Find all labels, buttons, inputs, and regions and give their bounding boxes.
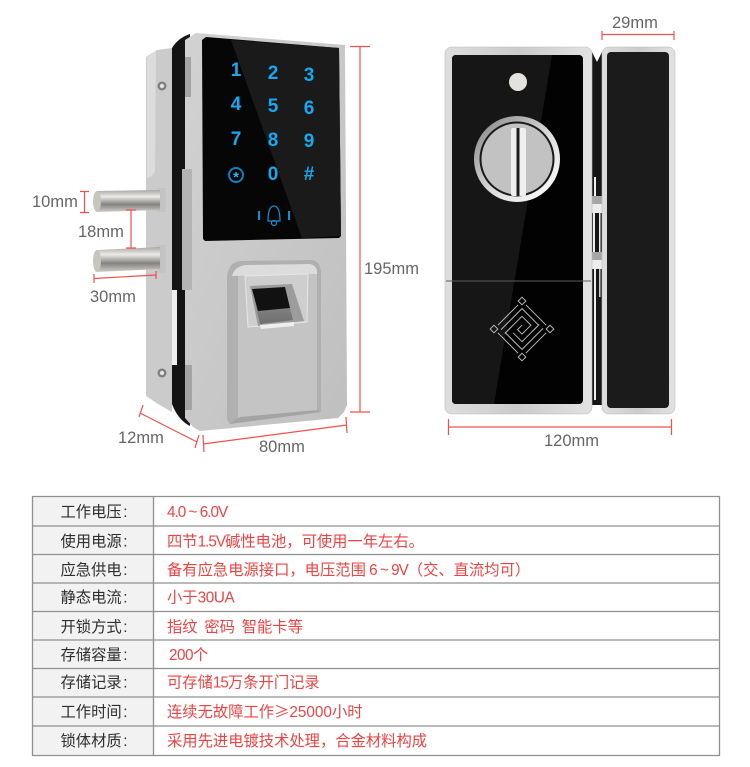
hinge covers: [182, 57, 192, 410]
row: working voltage: 4.0 ~ 6.0V: [167, 504, 229, 521]
right plate: [602, 47, 675, 414]
row: storage records: [60, 674, 320, 692]
dimension: 18mm: 18mm: [78, 223, 124, 241]
fingerprint housing: [227, 260, 321, 424]
dimension: 30mm: [90, 271, 156, 306]
label column shading: [33, 497, 153, 755]
keypad digits: 3: [304, 65, 314, 86]
product: side-angle lock with keypad: [93, 33, 347, 431]
keypad digits: 6: [304, 98, 314, 119]
row: storage capacity: 200个: [169, 647, 208, 664]
locking pins: [93, 188, 166, 273]
table grid: [32, 496, 720, 756]
dimension: 10mm: 10mm: [32, 193, 78, 211]
keypad digits: 9: [304, 131, 314, 152]
row: body material: 锁体材质:: [60, 733, 127, 750]
dimension: 120mm: 120mm: [544, 432, 599, 450]
row: storage records: 可存储15万条开门记录: [167, 674, 320, 692]
keypad digits: 5: [268, 96, 279, 117]
row: static current: [60, 590, 235, 606]
keypad glass panel: [202, 37, 341, 241]
row: unlock methods: 指纹 密码 智能卡等: [167, 618, 303, 636]
row: emergency power: 备有应急电源接口，电压范围 6 ~ 9V（交、直流均可）: [167, 561, 530, 579]
keypad digits: 2: [268, 63, 278, 84]
row: power source: 使用电源:: [60, 534, 127, 550]
black face: [452, 55, 583, 404]
row: power source: 四节1.5V碱性电池，可使用一年左右。: [167, 534, 424, 550]
product: rear lock unit: [445, 47, 675, 414]
dimension: 80mm: [203, 417, 347, 456]
dimension: 12mm: [118, 405, 199, 448]
row: working time: 工作时间:: [60, 704, 127, 721]
dimension: 195mm: 195mm: [364, 260, 419, 278]
left plate: [445, 47, 592, 414]
dimension: 18mm: [78, 210, 136, 248]
dimension: 30mm: 30mm: [90, 288, 136, 306]
diamond logo: [490, 297, 554, 361]
row: working voltage: 工作电压:: [60, 504, 127, 521]
indicator dot: [509, 73, 527, 91]
connector between plates: [592, 52, 602, 405]
row: unlock methods: [60, 618, 303, 636]
leather pad: [607, 52, 669, 408]
glass gap strip: [172, 34, 190, 426]
thumb-turn knob: [474, 116, 560, 202]
row: working voltage: [60, 504, 229, 521]
dimension: 29mm: [602, 14, 674, 40]
dimension: 10mm: [32, 191, 89, 212]
dimension: 12mm: 12mm: [118, 429, 164, 447]
row: working time: [60, 700, 363, 722]
row: unlock methods: 开锁方式:: [60, 619, 127, 636]
dimension: 80mm: 80mm: [259, 438, 305, 456]
dimension: 29mm: 29mm: [612, 14, 658, 32]
row: emergency power: 应急供电:: [60, 561, 127, 579]
keypad digits: 0: [268, 164, 278, 185]
keypad digits: #: [304, 164, 315, 185]
row: working time: 连续无故障工作≥25000小时: [167, 700, 363, 722]
row: storage capacity: 存储容量:: [60, 647, 127, 664]
back mounting plate: [146, 48, 172, 412]
keypad digits: *: [233, 169, 239, 186]
keypad digits: 4: [231, 94, 242, 115]
keypad digits: [229, 60, 315, 186]
row: body material: 采用先进电镀技术处理，合金材料构成: [167, 733, 427, 750]
row: storage capacity: [60, 647, 208, 664]
keypad digits: 1: [231, 60, 242, 81]
row: storage records: 存储记录:: [60, 674, 127, 692]
row: static current: 小于30UA: [167, 590, 235, 606]
keypad digits: 7: [231, 129, 241, 150]
specification table: [32, 496, 720, 756]
keypad digits: 8: [268, 130, 278, 151]
dimension: 195mm: [350, 46, 419, 412]
front silver body: [185, 33, 347, 431]
row: static current: 静态电流:: [60, 590, 127, 606]
dimension: 120mm: [448, 419, 672, 450]
bell icon: [259, 206, 289, 226]
